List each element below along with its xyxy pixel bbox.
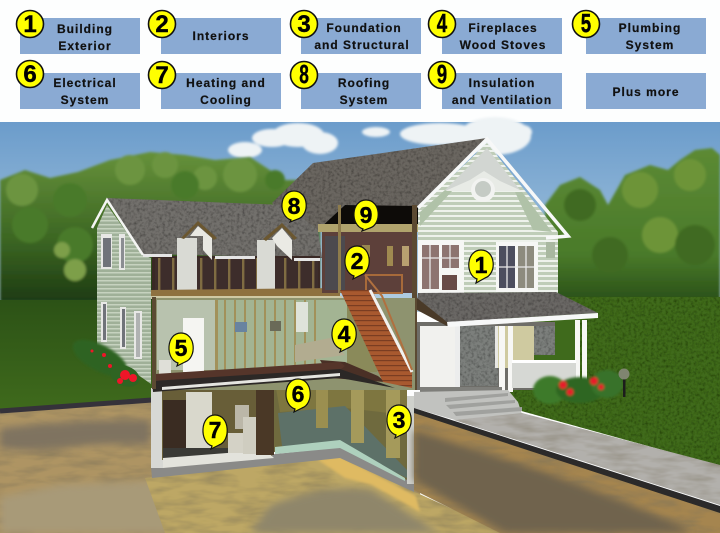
marker 4: 4: [338, 321, 351, 347]
legend item 5: plumbing system: System: [626, 38, 674, 52]
upper main roof: [272, 138, 487, 232]
trees left: [0, 152, 320, 303]
corner post: [412, 205, 417, 390]
legend item 1: building exterior: Exterior: [58, 39, 112, 53]
legend item 6: electrical system: System: [61, 93, 109, 107]
marker 1: [469, 250, 493, 283]
legend item: plus more: [586, 73, 706, 109]
legend item 4: fireplaces wood stoves: [428, 9, 562, 54]
marker 2: [345, 246, 369, 279]
legend item 6: electrical system: [16, 60, 140, 109]
marker 9: [354, 200, 378, 231]
side vent: [546, 242, 555, 258]
map markers: [169, 191, 493, 449]
legend item 8: roofing system: System: [340, 93, 388, 107]
porch: [417, 320, 587, 392]
legend item 1: building exterior: Building: [57, 22, 113, 36]
legend item 3: foundation and structural: [290, 10, 421, 54]
yard lamp: [618, 368, 630, 397]
legend item 3: foundation and structural: and Structural: [314, 38, 410, 52]
legend item 9: insulation and ventilation: and Ventilation: [452, 93, 552, 107]
staircase: [340, 275, 412, 388]
legend item 8: roofing system: 8: [299, 59, 309, 89]
front walkway: [454, 413, 720, 505]
window left: [418, 240, 464, 294]
marker 5: [169, 333, 193, 366]
lawn right: [500, 297, 720, 466]
left wing roof: [107, 198, 322, 258]
gable vent: [471, 178, 495, 202]
marker 7: 7: [209, 417, 221, 443]
left side wall: [97, 205, 151, 384]
marker 3: [387, 405, 411, 438]
legend item 9: insulation and ventilation: [428, 60, 562, 109]
legend item 8: roofing system: [290, 59, 421, 109]
first floor interior: [152, 297, 415, 392]
legend item 2: interiors: 2: [155, 11, 169, 38]
marker 6: 6: [292, 381, 304, 407]
legend item 1: building exterior: 1: [23, 11, 37, 38]
sky with clouds: [0, 117, 720, 312]
shrubs right: [533, 370, 623, 404]
marker 4: [332, 319, 356, 352]
house cutaway scene: [0, 117, 720, 533]
shrubs left: [67, 332, 143, 391]
soil cross section: [414, 408, 720, 533]
soil left and excavated ground: [0, 398, 505, 533]
legend item 3: foundation and structural: Foundation: [326, 21, 402, 35]
trees right: [545, 148, 720, 300]
legend item 2: interiors: [148, 10, 281, 54]
lawn left: [0, 300, 160, 410]
legend item 4: fireplaces wood stoves: Wood Stoves: [460, 38, 546, 52]
porch roof: [417, 292, 598, 327]
foundation footing and basement floor: [151, 388, 415, 492]
legend item 5: plumbing system: 5: [581, 9, 591, 38]
marker 7: [203, 415, 227, 449]
legend item 5: plumbing system: Plumbing: [619, 21, 681, 35]
marker 8: 8: [288, 193, 301, 219]
legend item 6: electrical system: Electrical: [53, 76, 117, 90]
legend item 7: heating and cooling: Cooling: [200, 93, 252, 107]
marker 6: [286, 379, 310, 412]
legend item 7: heating and cooling: Heating and: [186, 76, 266, 90]
marker 5: 5: [175, 335, 188, 361]
marker 2: 2: [351, 248, 363, 274]
front gable wall: [418, 143, 558, 297]
legend item 5: plumbing system: [572, 9, 706, 54]
marker 1: 1: [475, 252, 488, 278]
gable trim: [418, 139, 568, 238]
legend item 3: foundation and structural: 3: [297, 11, 311, 38]
side wall windows: [101, 234, 142, 359]
legend item 8: roofing system: Roofing: [338, 76, 390, 90]
legend item 7: heating and cooling: [148, 62, 281, 109]
window right: [496, 242, 538, 292]
marker 8: [282, 191, 306, 222]
dormers: [143, 221, 320, 261]
legend item 7: heating and cooling: 7: [155, 62, 169, 89]
legend: [16, 9, 706, 109]
legend item 6: electrical system: 6: [23, 61, 37, 88]
upper floor framing: [151, 238, 342, 299]
legend item 2: interiors: Interiors: [192, 29, 250, 43]
legend item 4: fireplaces wood stoves: Fireplaces: [468, 21, 538, 35]
attic insulation and upper room: [318, 205, 418, 293]
porch steps: [414, 390, 522, 420]
marker 9: 9: [360, 202, 372, 228]
marker 3: 3: [393, 407, 405, 433]
legend item 9: insulation and ventilation: Insulation: [469, 76, 535, 90]
basement interior: [162, 376, 407, 481]
left gable trim: [92, 200, 143, 255]
legend item 9: insulation and ventilation: 9: [437, 60, 447, 89]
legend item 4: fireplaces wood stoves: 4: [437, 9, 448, 38]
legend item 1: building exterior: [16, 10, 140, 54]
legend item: plus more: Plus more: [612, 85, 680, 99]
